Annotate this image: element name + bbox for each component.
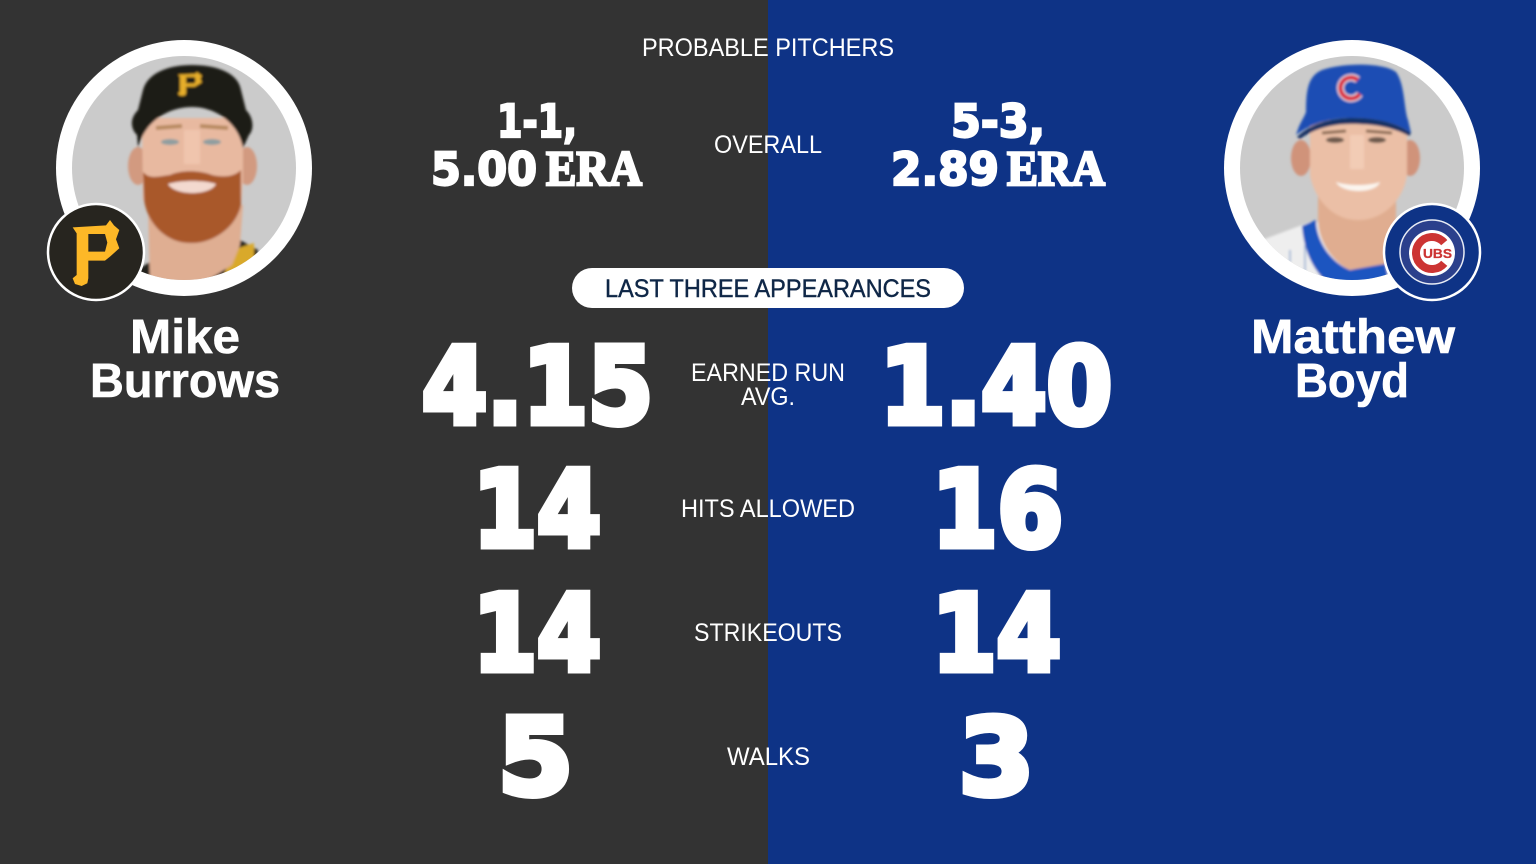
stat row: hits allowed: HITS ALLOWED [681, 495, 855, 523]
stat row: hits allowed [473, 449, 1063, 571]
stat row: hits allowed: 16 [932, 449, 1063, 571]
stat row: overall record: 5-3, [951, 95, 1045, 148]
player name: Matthew Boyd [1251, 311, 1456, 408]
stat row: overall record: 1-1, [497, 95, 577, 148]
stat row: earned run average: AVG. [741, 383, 795, 411]
stat row: walks: 3 [959, 697, 1034, 819]
player name: Matthew Boyd: Boyd [1295, 355, 1409, 408]
player name: Mike Burrows [90, 311, 280, 408]
player name: Mike Burrows: Mike [130, 311, 240, 364]
stat row: earned run average: 1.40 [880, 326, 1112, 448]
stat row: strikeouts: STRIKEOUTS [694, 619, 842, 647]
stat row: earned run average: EARNED RUN [691, 359, 845, 387]
stat row: earned run average [422, 326, 1112, 448]
player photo: Matthew Boyd [1224, 40, 1480, 296]
icon: Pirates P [73, 220, 119, 286]
team logo: Cubs [1384, 204, 1480, 300]
panel: Cubs side background [768, 0, 1536, 864]
pill heading: last three appearances [572, 268, 964, 308]
logo lettering: UBS [1423, 246, 1452, 261]
stat row: overall record: ERA [546, 140, 642, 196]
team logo: Pirates [48, 204, 144, 300]
player name: Matthew Boyd: Matthew [1251, 311, 1456, 364]
stat row: walks [498, 697, 1034, 819]
stat row: overall record [431, 95, 1105, 196]
stat row: hits allowed: 14 [473, 449, 601, 571]
heading: probable pitchers: PROBABLE PITCHERS [642, 34, 894, 62]
pill heading: last three appearances: LAST THREE APPEARANCES [605, 275, 931, 303]
player name: Mike Burrows: Burrows [90, 355, 280, 408]
stat row: strikeouts: 14 [932, 573, 1061, 695]
panel: Pirates side background [0, 0, 768, 864]
stat row: overall record: OVERALL [714, 131, 822, 159]
stat row: walks: 5 [498, 697, 573, 819]
stat row: overall record: 2.89 [891, 143, 999, 196]
stat row: overall record: 5.00 [431, 143, 537, 196]
stat row: earned run average: 4.15 [422, 326, 653, 448]
player photo: Mike Burrows [56, 40, 312, 296]
stat row: overall record: ERA [1007, 140, 1105, 196]
stat row: strikeouts [473, 573, 1061, 695]
stat row: strikeouts: 14 [473, 573, 601, 695]
stat row: walks: WALKS [727, 743, 810, 771]
